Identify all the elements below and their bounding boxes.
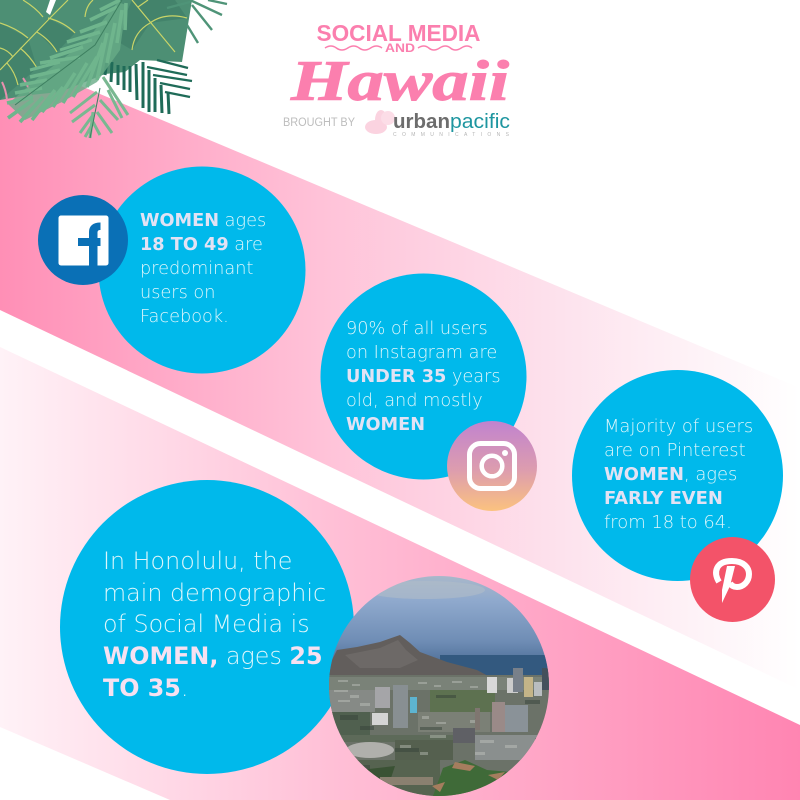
pond — [346, 742, 394, 758]
buildings — [372, 668, 549, 743]
pinterest text: from 18 to 64. — [604, 512, 732, 533]
pinterest text: Majority of users — [604, 416, 753, 437]
facebook text: predominant — [140, 259, 253, 279]
pink stems — [2, 78, 32, 100]
large dark leaves — [0, 0, 192, 100]
upper diagonal gradient band — [0, 52, 800, 690]
logo: wordmark accent: pacific — [450, 111, 510, 133]
pinterest circle — [572, 370, 783, 581]
panel: facebook — [38, 166, 306, 374]
facebook text: 18 TO 49 are — [140, 235, 263, 255]
tropical leaves — [0, 0, 227, 138]
panel: honolulu — [60, 480, 354, 774]
diamond head — [329, 635, 490, 677]
honolulu text: main demographic — [103, 579, 326, 607]
ocean — [440, 655, 550, 675]
light green frond — [7, 0, 126, 122]
facebook circle — [98, 166, 306, 374]
upper right frond — [167, 0, 227, 43]
honolulu text: In Honolulu, the — [103, 547, 292, 575]
leaf veins — [0, 0, 187, 85]
facebook text: WOMEN ages — [140, 211, 266, 231]
title line: hawaii: Hawaii — [290, 49, 509, 113]
honolulu circle — [60, 480, 354, 774]
panel: instagram — [320, 274, 537, 511]
logo: lotus — [365, 110, 395, 134]
icon: instagram — [447, 421, 537, 511]
honolulu text: of Social Media is — [103, 610, 310, 638]
brought by: BROUGHT BY — [283, 117, 355, 129]
city texture — [334, 680, 517, 755]
instagram text: WOMEN — [346, 415, 425, 435]
pinterest text: WOMEN, ages — [604, 464, 737, 485]
logo: wordmark: urban — [393, 111, 450, 133]
photo: Honolulu and Diamond Head — [329, 576, 550, 796]
foreground foliage — [433, 760, 510, 796]
instagram text: on Instagram are — [346, 343, 497, 363]
small pale frond — [70, 77, 128, 138]
facebook text: Facebook. — [140, 307, 229, 327]
pinterest text: FARLY EVEN — [604, 488, 723, 509]
wavy lines — [325, 46, 472, 50]
honolulu text: TO 35. — [103, 674, 188, 702]
panel: pinterest — [572, 370, 783, 622]
title line: and: AND — [385, 41, 415, 55]
title line: social media: SOCIAL MEDIA — [316, 20, 481, 46]
city — [329, 675, 549, 796]
honolulu text: WOMEN, ages 25 — [103, 642, 323, 670]
icon: pinterest — [690, 537, 775, 622]
instagram text: UNDER 35 years — [346, 367, 501, 387]
lower diagonal gradient band — [0, 347, 800, 800]
title — [283, 20, 510, 138]
facebook text: users on — [140, 283, 215, 303]
instagram circle — [320, 274, 526, 480]
dark teal fronds — [105, 60, 192, 114]
pinterest text: are on Pinterest — [604, 440, 746, 461]
icon: facebook — [38, 195, 128, 285]
logo: subtitle: COMMUNICATIONS — [393, 132, 510, 138]
instagram text: old, and mostly — [346, 391, 483, 411]
instagram text: 90% of all users — [346, 319, 488, 339]
